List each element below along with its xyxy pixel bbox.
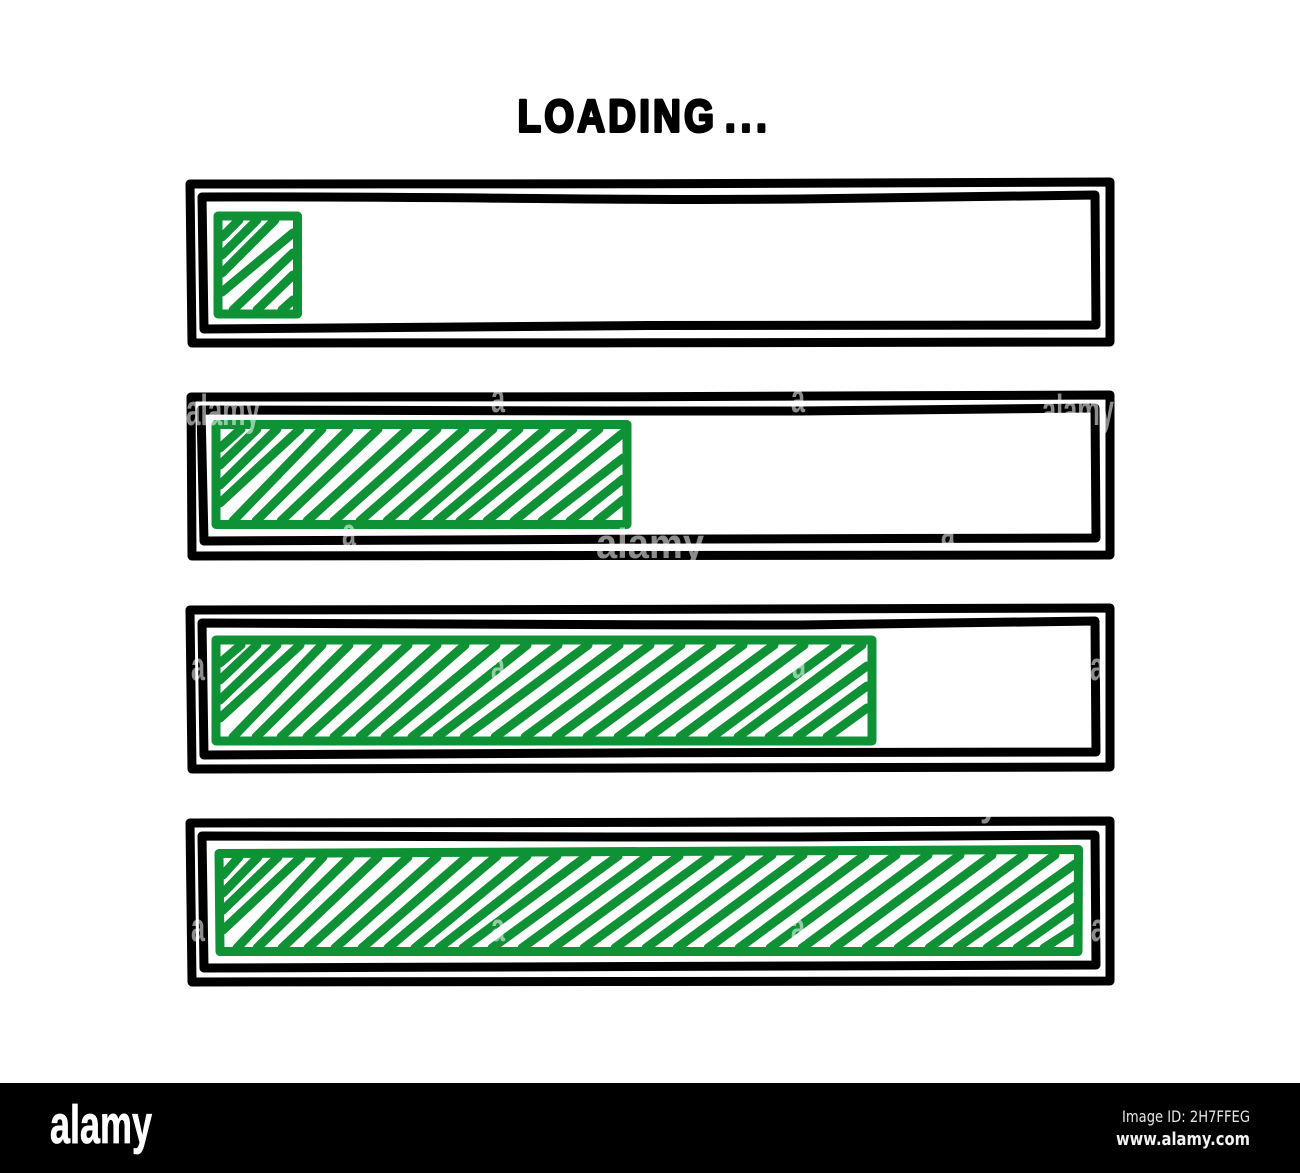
- watermarks: a: [791, 377, 805, 421]
- watermarks: a: [791, 906, 805, 950]
- progress bar: 72 percent: [190, 608, 1110, 769]
- green fill: [219, 850, 1078, 952]
- bar frame outer: [190, 182, 1110, 343]
- progress bar: 45 percent: [191, 395, 1110, 556]
- bar frame inner: [202, 195, 1096, 329]
- watermarks: a: [491, 645, 505, 689]
- title: ...: [725, 91, 772, 141]
- title: LOADING: [518, 91, 717, 141]
- green fill: [216, 424, 627, 524]
- bar frame inner: [202, 621, 1096, 755]
- alamy logo: alamy: [50, 1095, 152, 1155]
- watermarks: alamy: [596, 520, 705, 567]
- green fill: [216, 640, 872, 741]
- bar frame inner: [201, 408, 1096, 541]
- watermarks: a: [792, 643, 806, 687]
- watermarks: a: [491, 906, 505, 950]
- watermarks: a: [491, 377, 505, 421]
- footer bar: [0, 1083, 1300, 1173]
- progress bar: 100 percent: [190, 821, 1110, 982]
- watermarks: [186, 377, 1114, 950]
- watermarks: alamy: [186, 386, 260, 435]
- watermarks: a: [1091, 906, 1105, 950]
- progress bar: 10 percent: [190, 182, 1110, 343]
- watermarks: a: [941, 511, 955, 555]
- watermarks: a: [1090, 645, 1104, 689]
- bar frame outer: [190, 821, 1110, 982]
- watermarks: alamy: [1042, 386, 1114, 435]
- image id: Image ID: 2H7FFEG: [1122, 1107, 1250, 1126]
- watermarks: a: [342, 511, 356, 555]
- bar frame outer: [191, 395, 1110, 556]
- green fill: [218, 216, 298, 314]
- watermarks: a: [191, 645, 205, 689]
- watermarks: a: [191, 906, 205, 950]
- watermarks: y: [980, 780, 999, 824]
- bar frame inner: [202, 835, 1096, 968]
- bar frame outer: [190, 608, 1110, 769]
- website: www.alamy.com: [1116, 1129, 1250, 1150]
